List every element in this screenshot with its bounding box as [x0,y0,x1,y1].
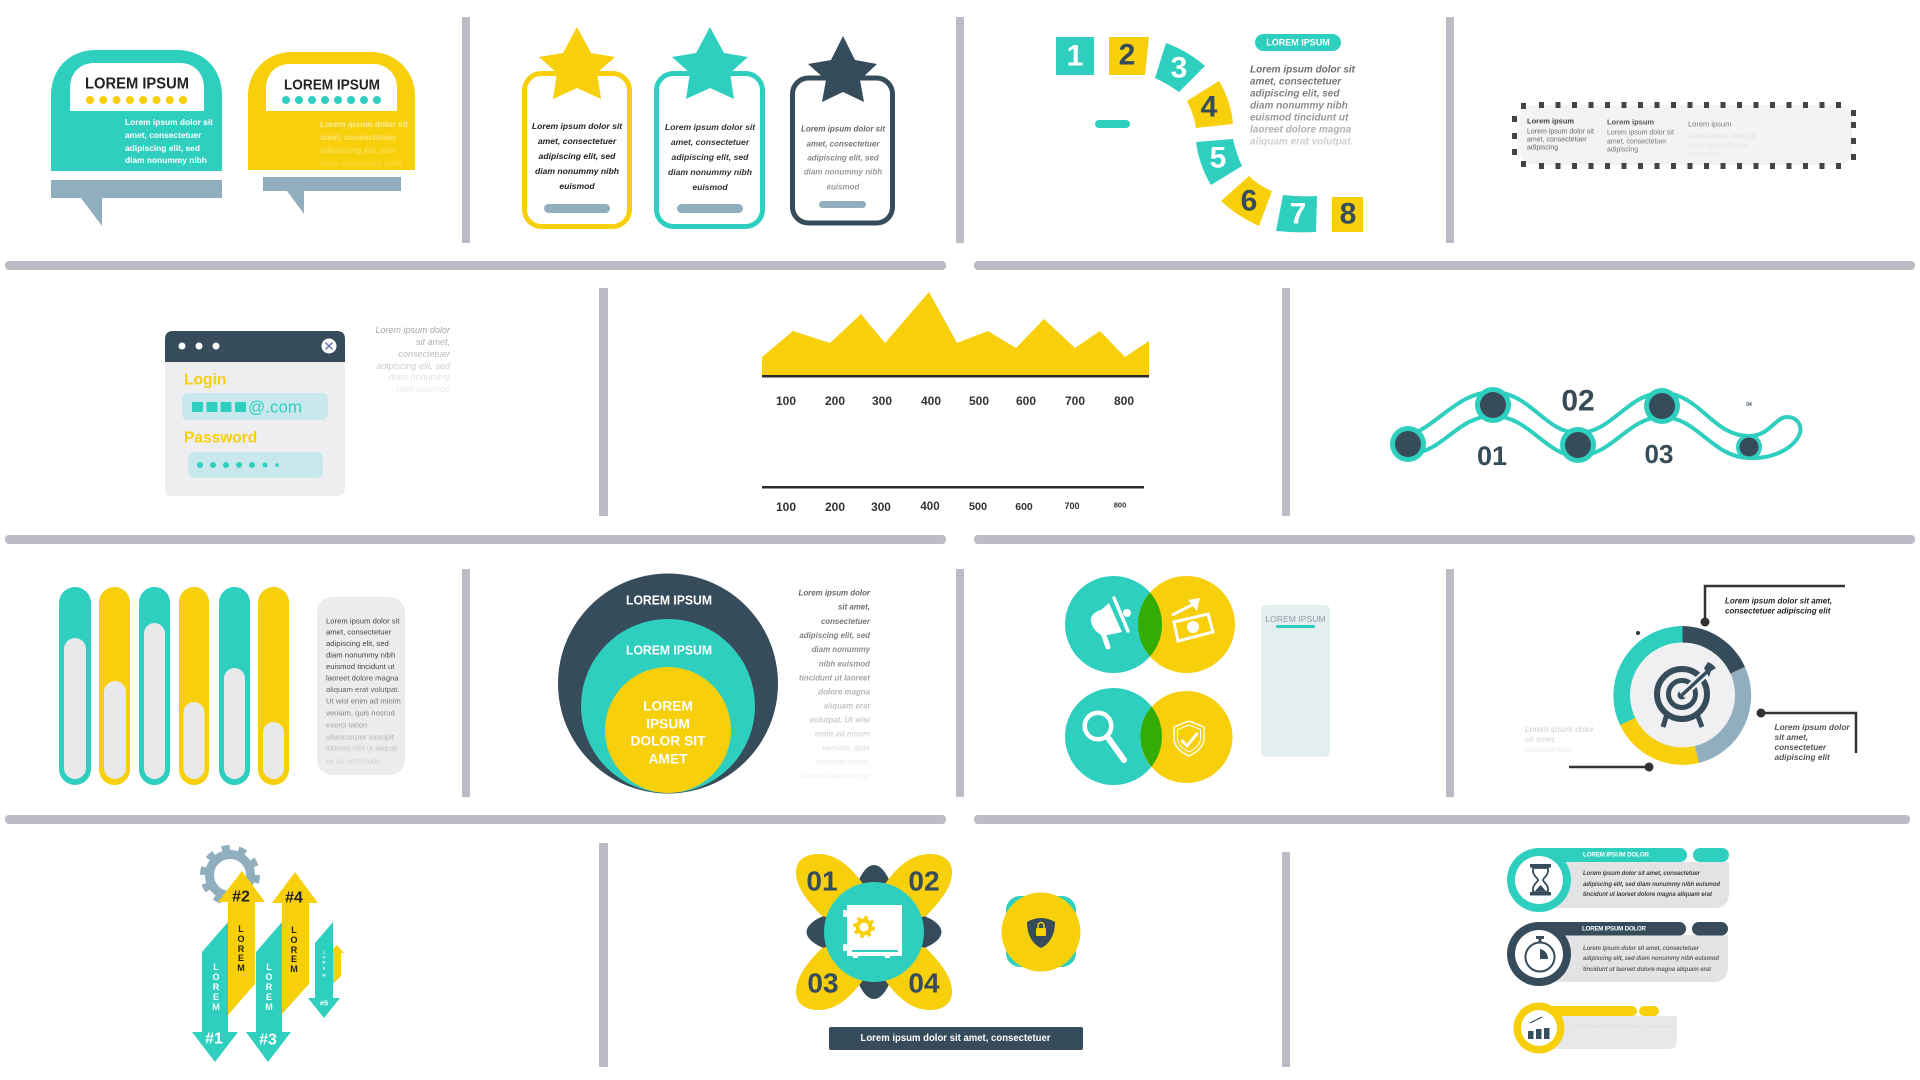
panel: yellow star card: Lorem ipsum dolor sit [532,121,623,131]
panel: dotted frame with three columns: amet, consectetuer [1527,136,1587,144]
panel: login window: Login [184,372,226,388]
panel: up and down arrows: M [290,964,298,974]
panel: up and down arrows: #4 [285,890,303,906]
panel: dotted frame with three columns [1512,102,1856,169]
panel: up and down arrows: L [291,925,297,935]
panel: dotted frame with three columns: Lorem ipsum dolor sit [1527,128,1594,136]
chart: yellow area chart: 100 [776,394,796,408]
pill heading: LOREM IPSUM [1266,38,1330,48]
chart: yellow area chart [762,292,1149,408]
panel: bottom venn pair [1065,688,1232,785]
panel: teal speech bubble: diam nonummy nibh [125,155,207,165]
panel: hourglass row: LOREM IPSUM DOLOR [1583,852,1650,858]
panel: numbered arc steps: 8 [1340,198,1356,230]
panel: bar chart row [1514,1002,1677,1054]
text block: login note [375,325,451,394]
panel: up and down arrows: M [237,963,245,973]
icon: safe with gear [843,905,902,958]
panel: up and down arrows: R [213,982,220,992]
callout: top right: consectetuer adipiscing elit [1725,606,1831,616]
text block: login note: diam nonummy [388,372,450,382]
panel: dotted frame with three columns: amet, consectetuer [1688,142,1748,150]
text block: gray note: aliquam erat volutpat. [326,685,400,694]
text block: circles description [799,588,871,780]
chart: empty axis: 100 [776,500,796,514]
panel: up and down arrows: M [212,1002,220,1012]
panel: nested circles: DOLOR SIT [630,734,706,748]
panel: dotted frame with three columns: Lorem ipsum [1688,120,1731,128]
text block: gray note: lobortis nisl ut aliquip [326,744,397,752]
panel: hourglass row: adipiscing elit, sed diam nonummy nibh euismod [1583,882,1720,888]
icon: megaphone [1091,598,1131,647]
panel: up and down arrows: L [238,924,244,934]
chart: yellow area chart: 800 [1114,394,1134,408]
panel: hourglass row [1507,848,1729,912]
text block: gray note: Lorem ipsum dolor sit [326,616,400,626]
panel: teal star card: amet, consectetuer [671,137,750,147]
panel: numbered arc steps: 1 [1067,40,1083,72]
panel: wave timeline [1390,384,1800,471]
text block: circles description: aliquam erat [824,702,870,710]
icon: hourglass [1530,864,1551,896]
caption bar: Lorem ipsum dolor sit amet, consectetuer [860,1033,1051,1044]
panel: dotted frame with three columns: adipiscing [1607,146,1638,154]
chart: yellow area chart: 700 [1065,394,1085,408]
panel: yellow speech bubble: diam nonummy nibh [320,158,402,168]
callout: right: Lorem ipsum dolor [1774,722,1850,732]
text block: circles description: dolore magna [818,688,871,696]
panel: login window [165,331,345,496]
panel: dotted frame with three columns: Lorem ipsum dolor sit [1688,134,1755,140]
chart: empty axis: 200 [825,500,845,514]
icon: lock shield badge [1002,892,1080,972]
caption bar [829,1027,1083,1050]
panel: up and down arrows: O [265,972,273,982]
icon: rising bar chart [1528,1017,1550,1039]
text block: login note: sit amet, [416,337,450,347]
panel: up and down arrows: R [291,945,298,955]
text block: gray note: Ut wisi enim ad minim [326,696,401,706]
panel: nested circles: IPSUM [646,716,690,732]
panel: dotted frame with three columns: adipiscing [1527,144,1558,152]
panel: up and down arrows: O [322,954,326,960]
panel: stopwatch row: LOREM IPSUM DOLOR [1582,926,1647,932]
panel: up and down arrows: O [212,972,220,982]
callout: right [1756,708,1856,762]
panel: up and down arrows [192,871,344,1062]
panel: teal speech bubble: amet, consectetuer [125,130,202,140]
chart: yellow area chart: 400 [921,394,941,408]
panel: dark star card [792,36,892,223]
callout: lower left: Lorem ipsum dolor [1525,724,1595,734]
chart: empty axis [762,486,1144,514]
panel: dark star card: diam nonummy nibh [804,168,882,176]
text block: gray note: euismod tincidunt ut [326,662,395,671]
panel: up and down arrows: O [237,934,245,944]
text block: circles description: nibh euismod [819,660,870,668]
panel: top venn pair [1065,576,1235,673]
text block: login note: adipiscing elit, sed [376,361,451,371]
panel: dotted frame with three columns: Lorem ipsum [1607,118,1654,126]
panel: wave timeline: 04 [1746,402,1752,408]
text block: circles description: consectetuer [821,617,871,626]
chart: empty axis: 800 [1114,500,1126,510]
panel: teal speech bubble [51,50,222,226]
icon: shield check [1174,721,1204,756]
chart: yellow area chart: 300 [872,394,892,408]
text block: gray note: adipiscing elit, sed [326,639,389,648]
callout: top right: Lorem ipsum dolor sit amet, [1725,596,1832,606]
text block: arc description [1250,64,1356,148]
text block: arc description: euismod tincidunt ut [1250,112,1349,124]
panel: nested circles: AMET [648,752,688,766]
panel: hourglass row: tincidunt ut laoreet dolore magna aliquam erat [1583,892,1713,898]
callout: lower left [1525,631,1654,772]
panel: login window: Password [184,430,257,446]
panel: numbered arc steps: 7 [1290,198,1306,230]
panel: up and down arrows: L [213,962,219,972]
callout: right: adipiscing elit [1774,752,1831,762]
text block: arc description: adipiscing elit, sed [1250,88,1340,100]
panel: teal speech bubble: LOREM IPSUM [85,76,189,92]
chart: yellow area chart: 500 [969,394,989,408]
panel: nested circles [558,574,778,794]
text block: gray note [317,597,405,775]
panel: hourglass row: Lorem ipsum dolor sit amet, consectetuer [1583,871,1701,877]
panel: numbered arc steps: 2 [1119,38,1135,72]
panel: teal star card: Lorem ipsum dolor sit [665,122,756,132]
panel: pale note card [1261,605,1330,757]
panel: four petal flower: 02 [908,866,940,896]
panel: yellow speech bubble: LOREM IPSUM [284,76,380,94]
panel: pale note card: LOREM IPSUM [1265,614,1326,624]
panel: four petal flower [796,854,952,1010]
panel: dark star card: euismod [827,182,861,192]
panel: up and down arrows: #5 [320,998,328,1008]
callout: top right [1700,586,1845,626]
panel: four petal flower: 03 [807,968,839,998]
panel: teal star card: adipiscing elit, sed [672,152,749,162]
panel: bar chart row: Lorem ipsum dolor sit amet, consectetuer [1575,1024,1676,1030]
text block: gray note: diam nonummy nibh [326,650,395,660]
text block: circles description: sit amet, [838,602,870,612]
panel: wave timeline: 02 [1561,384,1595,418]
panel: wave timeline: 03 [1645,439,1673,469]
panel: yellow speech bubble: Lorem ipsum dolor sit [320,119,408,129]
panel: numbered arc steps: 6 [1241,184,1257,218]
text block: gray note: ullamcorper suscipit [326,732,395,742]
icon: gear [203,848,257,902]
panel: up and down arrows: #2 [232,888,250,906]
panel: up and down arrows: E [266,992,272,1002]
icon: magnifier [1085,713,1124,760]
text block: arc description: aliquam erat volutpat. [1250,136,1353,148]
panel: yellow star card: adipiscing elit, sed [539,151,616,161]
panel: up and down arrows: E [238,953,244,963]
panel: dark star card: adipiscing elit, sed [807,154,880,162]
text block: login note: nibh euismod [396,384,451,394]
panel: stopwatch row: tincidunt ut laoreet dolore magna aliquam erat [1583,967,1712,973]
text block: gray note: exerci tation [326,720,367,730]
text block: arc description: Lorem ipsum dolor sit [1250,64,1356,76]
callout: lower left: consectetuer [1525,744,1574,754]
panel: yellow speech bubble [248,52,415,214]
panel: dark star card: amet, consectetuer [807,140,880,148]
panel: teal speech bubble: Lorem ipsum dolor sit [125,117,213,127]
panel: login window: @.com [248,398,302,416]
panel: up and down arrows: #3 [259,1032,277,1048]
panel: dark star card: Lorem ipsum dolor sit [801,124,885,134]
icon: target with arrow [1657,662,1716,727]
panel: up and down arrows: O [290,935,298,945]
panel: numbered arc steps: 3 [1171,52,1187,84]
text block: circles description: adipiscing elit, sed [799,631,870,640]
text block: circles description: veniam, quis [822,744,871,752]
panel: nested circles: LOREM IPSUM [626,642,712,658]
text block: login note: Lorem ipsum dolor [375,325,451,335]
panel: up and down arrows: R [266,982,273,992]
panel: up and down arrows: L [323,950,326,954]
text block: circles description: nostrud exerci [816,758,871,766]
panel: numbered arc steps: 4 [1201,90,1218,124]
icon: money with arrow [1172,598,1213,641]
panel: stopwatch row [1507,922,1728,986]
text block: gray note: amet, consectetuer [326,628,392,636]
panel: dotted frame with three columns: Lorem ipsum dolor sit [1607,130,1674,136]
panel: teal star card [656,27,762,226]
text block: gray note: laoreet dolore magna [326,674,399,682]
text block: circles description: volutpat. Ut wisi [810,716,871,724]
panel: yellow star card: diam nonummy nibh [535,166,619,176]
panel: four petal flower: 04 [908,968,940,998]
text block: circles description: tincidunt ut laoreet [799,674,870,682]
text block: gray note: ex ea commodo [326,756,381,766]
panel: dotted frame with three columns: adipiscing [1688,152,1719,158]
text block: login note: consectetuer [398,349,451,359]
panel: yellow speech bubble: amet, consectetuer [320,132,397,142]
panel: up and down arrows: L [266,962,272,972]
panel: teal speech bubble: adipiscing elit, sed [125,143,200,153]
chart: empty axis: 600 [1015,501,1033,513]
panel: stopwatch row: Lorem ipsum dolor sit amet, consectetuer [1583,946,1700,952]
icon: stopwatch [1526,936,1554,972]
panel: stopwatch row: adipiscing elit, sed diam nonummy nibh euismod [1583,956,1719,962]
callout: right: sit amet, [1774,732,1808,742]
text block: circles description: enim ad minim [815,730,870,738]
panel: up and down arrows: E [213,992,219,1002]
chart: yellow area chart: 200 [825,394,845,408]
panel: numbered arc steps [1056,37,1363,232]
panel: yellow speech bubble: adipiscing elit, sed [320,145,395,155]
text block: circles description: Lorem ipsum dolor [799,588,871,598]
text block: circles description: tation ullamcorper [801,772,871,780]
callout: right: consectetuer [1774,742,1827,752]
panel: four petal flower: 01 [806,866,838,896]
panel: up and down arrows: E [291,954,297,964]
panel: dotted frame with three columns: amet, consectetuer [1607,138,1667,146]
text block: arc description: amet, consectetuer [1250,76,1342,88]
panel: vertical progress bars [59,587,289,785]
panel: teal star card: diam nonummy nibh [668,167,752,177]
panel: dotted frame with three columns: Lorem ipsum [1527,116,1574,126]
panel: yellow star card [524,27,630,226]
panel: numbered arc steps: 5 [1210,142,1226,174]
text block: arc description: laoreet dolore magna [1250,124,1352,136]
panel: up and down arrows: M [265,1002,273,1012]
callout: lower left: sit amet, [1525,734,1556,744]
pill heading [1255,34,1341,51]
panel: up and down arrows: E [323,966,326,970]
text block: gray note: veniam, quis nosrud [326,708,395,718]
text block: arc description: diam nonummy nibh [1250,100,1348,112]
chart: empty axis: 300 [871,500,891,514]
panel: up and down arrows: R [323,960,326,964]
panel: up and down arrows: R [238,944,245,954]
text block: circles description: diam nonummy [812,645,871,654]
panel: teal star card: euismod [692,182,728,192]
chart: empty axis: 500 [969,501,987,513]
chart: yellow area chart: 600 [1016,394,1036,408]
panel: up and down arrows: #1 [205,1030,223,1048]
panel: wave timeline: 01 [1477,441,1507,471]
panel: nested circles: LOREM IPSUM [626,592,712,608]
panel: up and down arrows: M [322,972,326,978]
chart: empty axis: 400 [920,501,940,513]
panel: yellow star card: amet, consectetuer [538,136,617,146]
panel: nested circles: LOREM [643,698,693,714]
panel: yellow star card: euismod [559,181,595,191]
chart: empty axis: 700 [1064,501,1080,511]
chart: target donut [1613,626,1751,765]
